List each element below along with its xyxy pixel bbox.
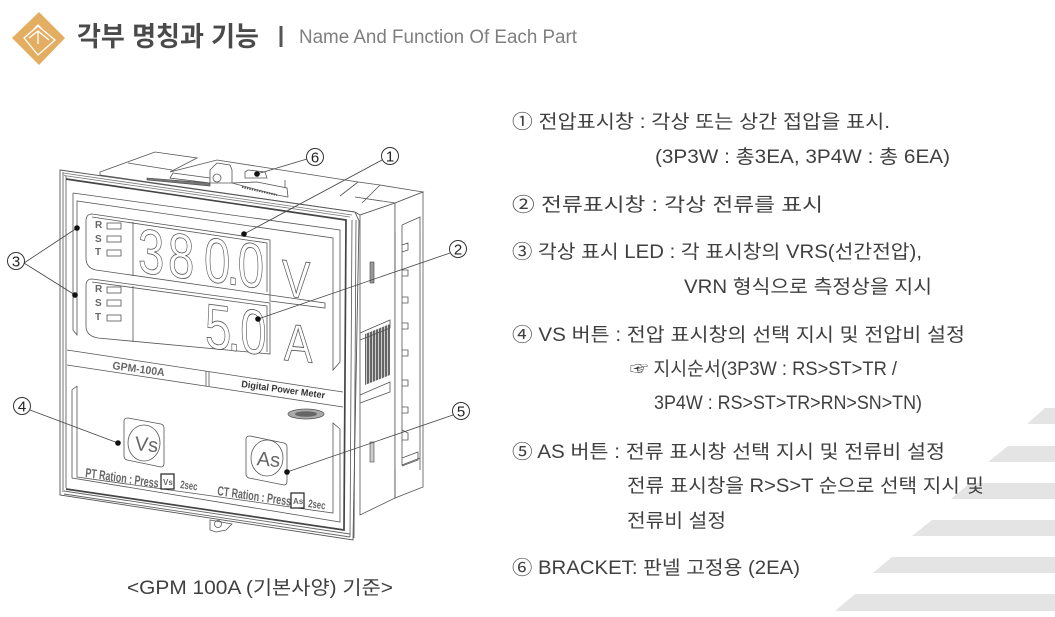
callout numbers: 1 [386,148,394,166]
item 4: ④ VS 버튼 : 전압 표시창의 선택 지시 및 전압비 설정 [512,324,965,346]
PT ration note [85,467,199,494]
LED indicators lower: R [95,284,103,295]
LED indicators upper: S [95,234,102,245]
faceplate frames [67,193,343,522]
device side body [360,192,423,515]
lower display panel [86,279,312,375]
device illustration [8,148,470,540]
model label: GPM-100A [112,360,166,379]
right bracket [232,170,288,197]
leader lines and markers [24,159,453,475]
unit A: A [284,314,312,375]
button: Vs: Vs [134,433,159,457]
bottom bracket [210,520,232,532]
background stripes [835,408,1055,611]
PT ration note: Vs [163,478,173,487]
subtitle: Name And Function Of Each Part [299,27,578,48]
icon: gold diamond [12,12,65,65]
item 6: ⑥ BRACKET: 판넬 고정용 (2EA) [512,557,800,579]
header [12,12,578,65]
item 5 [512,441,984,532]
vent grille [365,324,390,385]
left bracket [147,163,232,186]
LED indicators upper [95,220,121,258]
item 1: ① 전압표시창 : 각상 또는 상간 접압을 표시. [512,111,890,133]
device caption: <GPM 100A (기본사양) 기준> [127,577,393,599]
button: Vs [124,418,164,467]
item 1 [512,111,950,168]
title: 각부 명칭과 기능 [77,22,259,52]
title divider [280,26,282,47]
callout numbers: 2 [454,242,462,258]
CT ration note: CT Ration : Press [217,485,292,509]
front bezel [60,170,359,540]
voltage reading: 380.0 [138,214,264,302]
device top housing [100,152,423,215]
callout numbers: 4 [18,398,26,416]
CT ration note [217,485,327,513]
item 5: 전류 표시창을 R>S>T 순으로 선택 지시 및 [627,475,984,497]
callout numbers: 3 [12,254,20,270]
current reading: 5.0 [205,289,267,369]
callout numbers: 6 [311,150,319,166]
LED indicators upper: T [95,247,101,258]
item 3 [512,241,932,298]
LED indicators lower: T [95,312,101,323]
product label: Digital Power Meter [241,379,326,401]
CT ration note: 2sec [308,498,327,513]
LED indicators lower: S [95,298,102,309]
item 5: 전류비 설정 [627,510,726,532]
upper display panel [86,214,325,311]
item 4 [512,324,965,414]
side slots [370,262,374,283]
item 4: ☞ 지시순서(3P3W : RS>ST>TR / [630,358,898,380]
item 4: 3P4W : RS>ST>TR>RN>SN>TN) [654,393,922,414]
PT ration note: PT Ration : Press [85,467,159,491]
button: As [246,436,287,485]
CT ration note: As [293,497,304,506]
LED indicators lower [95,284,121,323]
LED indicators upper: R [95,220,103,231]
item 2: ② 전류표시창 : 각상 전류를 표시 [512,194,823,216]
item 3: ③ 각상 표시 LED : 각 표시창의 VRS(선간전압), [512,241,922,263]
unit V: V [282,250,310,311]
callout numbers [8,148,470,420]
brand logo [288,409,324,419]
PT ration note: 2sec [180,479,199,494]
side notches [402,243,418,466]
callout numbers: 5 [457,404,465,420]
description list [512,111,984,579]
item 3: VRN 형식으로 측정상을 지시 [684,276,932,298]
item 1: (3P3W : 총3EA, 3P4W : 총 6EA) [655,146,950,168]
button: As: As [256,448,281,472]
item 5: ⑤ AS 버튼 : 전류 표시창 선택 지시 및 전류비 설정 [512,441,945,463]
